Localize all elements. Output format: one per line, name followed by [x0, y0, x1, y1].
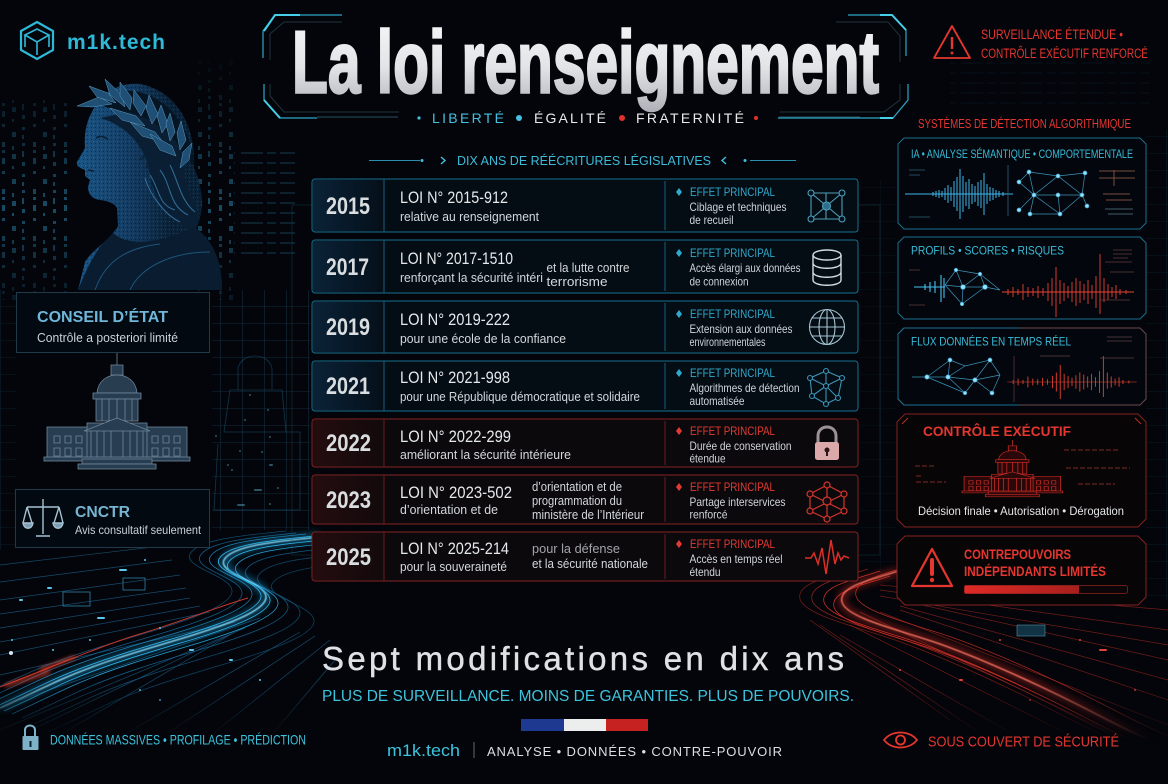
- row 2015: relative au renseignement: [400, 209, 539, 224]
- icon: scales: [23, 499, 63, 536]
- row 2023: [312, 475, 858, 524]
- icon: Conseil d'État building: [44, 353, 190, 469]
- row 2017: renforçant la sécurité intéri: [400, 270, 543, 285]
- row 2022: étendue: [690, 452, 726, 466]
- row 2025: 2025: [326, 544, 371, 571]
- row 2015: de recueil: [690, 213, 734, 227]
- row 2019: Extension aux données: [690, 322, 792, 336]
- chart: red stream: [1007, 356, 1137, 399]
- top-right warning: [934, 26, 1148, 61]
- panel: limited counter-powers: CONTREPOUVOIRS: [964, 547, 1071, 562]
- row 2017: et la lutte contre: [546, 260, 630, 275]
- panel: Conseil d'État: CONSEIL D’ÉTAT: [37, 307, 168, 326]
- bottom headline: Sept modifications en dix ans: [322, 640, 844, 677]
- top-right warning: SURVEILLANCE ÉTENDUE •: [981, 27, 1123, 42]
- icon: lock: [22, 726, 38, 750]
- ghost building backdrop: [214, 356, 300, 510]
- row 2017: de connexion: [690, 274, 748, 288]
- row 2022: 2022: [326, 430, 371, 457]
- row 2025: étendu: [690, 565, 720, 579]
- icon: database: [813, 250, 841, 285]
- row 2023: d’orientation et de: [400, 502, 498, 517]
- panel: executive control: CONTRÔLE EXÉCUTIF: [923, 422, 1071, 439]
- row 2015: LOI N° 2015-912: [400, 188, 508, 207]
- brand name: m1k.tech: [67, 31, 165, 54]
- section heading: DIX ANS DE RÉÉCRITURES LÉGISLATIVES: [457, 153, 711, 168]
- section heading: [369, 153, 796, 168]
- chart: profile network: [945, 268, 1000, 306]
- french flag: [521, 719, 648, 731]
- panel: AI analysis: [898, 138, 1146, 229]
- row 2025: [312, 532, 858, 581]
- footer right note: [884, 732, 1119, 750]
- panel: executive control: [897, 414, 1146, 527]
- row 2021: Algorithmes de détection: [690, 381, 800, 395]
- panel: CNCTR: CNCTR: [75, 504, 130, 521]
- row 2023: LOI N° 2023-502: [400, 483, 512, 502]
- icon: shared hub: [807, 482, 847, 522]
- row 2017: terrorisme: [546, 274, 608, 289]
- panel: profiles and scores: [898, 237, 1146, 319]
- row 2019: [312, 301, 858, 353]
- row 2023: renforcé: [690, 508, 728, 522]
- icon: hexagon cube: [21, 22, 53, 59]
- marianne bust: [70, 79, 230, 295]
- row 2025: LOI N° 2025-214: [400, 539, 509, 558]
- row 2022: Durée de conservation: [690, 439, 792, 453]
- panel: limited counter-powers: INDÉPENDANTS LIMITÉS: [964, 564, 1106, 579]
- footer left note: DONNÉES MASSIVES • PROFILAGE • PRÉDICTION: [50, 732, 306, 748]
- row 2025: Accès en temps réel: [690, 552, 782, 566]
- motto: ÉGALITÉ: [534, 110, 606, 126]
- panel: limited counter-powers: [897, 536, 1146, 605]
- row 2019: LOI N° 2019-222: [400, 310, 510, 329]
- logo: [21, 22, 165, 59]
- chart: data network: [912, 358, 1000, 395]
- footer left note: [22, 726, 306, 750]
- icon: neural network: [808, 368, 844, 406]
- row 2025: et la sécurité nationale: [532, 556, 648, 571]
- row 2021: [312, 361, 858, 411]
- laurel wreath: [77, 79, 192, 168]
- frame: [263, 15, 908, 118]
- motto: LIBERTÉ: [432, 110, 504, 126]
- panel: Conseil d'État: [16, 292, 210, 352]
- row 2021: 2021: [326, 373, 370, 400]
- row 2021: EFFET PRINCIPAL: [690, 368, 776, 380]
- motto: FRATERNITÉ: [636, 110, 744, 126]
- chart: red wave: [1002, 254, 1134, 317]
- row 2022: LOI N° 2022-299: [400, 427, 511, 446]
- chart: waveform: [905, 169, 1013, 219]
- footer brand: [387, 741, 782, 760]
- progress bar: [964, 586, 1128, 594]
- row 2022: [312, 419, 858, 467]
- row 2023: programmation du: [532, 493, 622, 508]
- chart: blue wave: [914, 275, 945, 302]
- row 2017: [312, 240, 858, 293]
- panel: CNCTR: [16, 490, 210, 548]
- row 2021: pour une République démocratique et solidaire: [400, 389, 640, 404]
- row 2019: 2019: [326, 314, 370, 341]
- chart: network: [1017, 170, 1089, 216]
- icon: eye: [884, 732, 917, 748]
- row 2023: EFFET PRINCIPAL: [690, 482, 776, 494]
- row 2017: EFFET PRINCIPAL: [690, 248, 776, 260]
- tagline: PLUS DE SURVEILLANCE. MOINS DE GARANTIES. PLUS DE POUVOIRS.: [322, 688, 854, 705]
- row 2015: Ciblage et techniques: [690, 200, 786, 214]
- readouts: [1099, 170, 1135, 214]
- row 2015: 2015: [326, 193, 370, 220]
- icon: pulse: [805, 540, 849, 574]
- icon: warning triangle: [934, 26, 970, 58]
- row 2023: ministère de l’Intérieur: [532, 507, 645, 522]
- row 2019: EFFET PRINCIPAL: [690, 309, 776, 321]
- panel: realtime data stream: [898, 328, 1146, 405]
- panel: realtime data stream: FLUX DONNÉES EN TEMPS RÉEL: [911, 334, 1071, 348]
- panel: CNCTR: Avis consultatif seulement: [75, 523, 202, 537]
- background: [0, 66, 1168, 600]
- row 2025: EFFET PRINCIPAL: [690, 539, 776, 551]
- footer brand: ANALYSE • DONNÉES • CONTRE-POUVOIR: [487, 744, 782, 759]
- row 2023: Partage interservices: [690, 495, 786, 509]
- row 2017: Accès élargi aux données: [690, 261, 800, 275]
- icon: globe: [810, 310, 844, 344]
- panel: profiles and scores: PROFILS • SCORES • RISQUES: [911, 244, 1064, 258]
- icon: red government building: [962, 440, 1063, 497]
- footer brand: m1k.tech: [387, 741, 460, 760]
- row 2022: améliorant la sécurité intérieure: [400, 447, 571, 462]
- row 2025: pour la souveraineté: [400, 559, 507, 574]
- row 2023: d’orientation et de: [532, 479, 622, 494]
- panel: Conseil d'État: Contrôle a posteriori limité: [37, 330, 178, 345]
- icon: network: [808, 190, 845, 222]
- row 2015: EFFET PRINCIPAL: [690, 187, 776, 199]
- row 2025: pour la défense: [532, 541, 620, 556]
- row 2017: LOI N° 2017-1510: [400, 249, 513, 268]
- main title: La loi renseignement: [292, 12, 879, 112]
- row 2019: environnementales: [690, 335, 766, 349]
- stream: blue and red flow: [0, 529, 1168, 738]
- row 2021: LOI N° 2021-998: [400, 368, 510, 387]
- row 2019: pour une école de la confiance: [400, 331, 566, 346]
- row 2022: EFFET PRINCIPAL: [690, 426, 776, 438]
- row 2015: [312, 179, 858, 232]
- motto: [417, 110, 758, 126]
- row 2023: 2023: [326, 487, 371, 514]
- row 2021: automatisée: [690, 394, 745, 408]
- row 2017: 2017: [326, 254, 369, 281]
- icon: padlock: [815, 427, 839, 460]
- icon: warning triangle: [912, 549, 952, 586]
- panel: executive control: Décision finale • Autorisation • Dérogation: [918, 504, 1124, 518]
- timeline connectors: [292, 205, 880, 555]
- title block: [263, 12, 908, 126]
- footer right note: SOUS COUVERT DE SÉCURITÉ: [928, 734, 1119, 750]
